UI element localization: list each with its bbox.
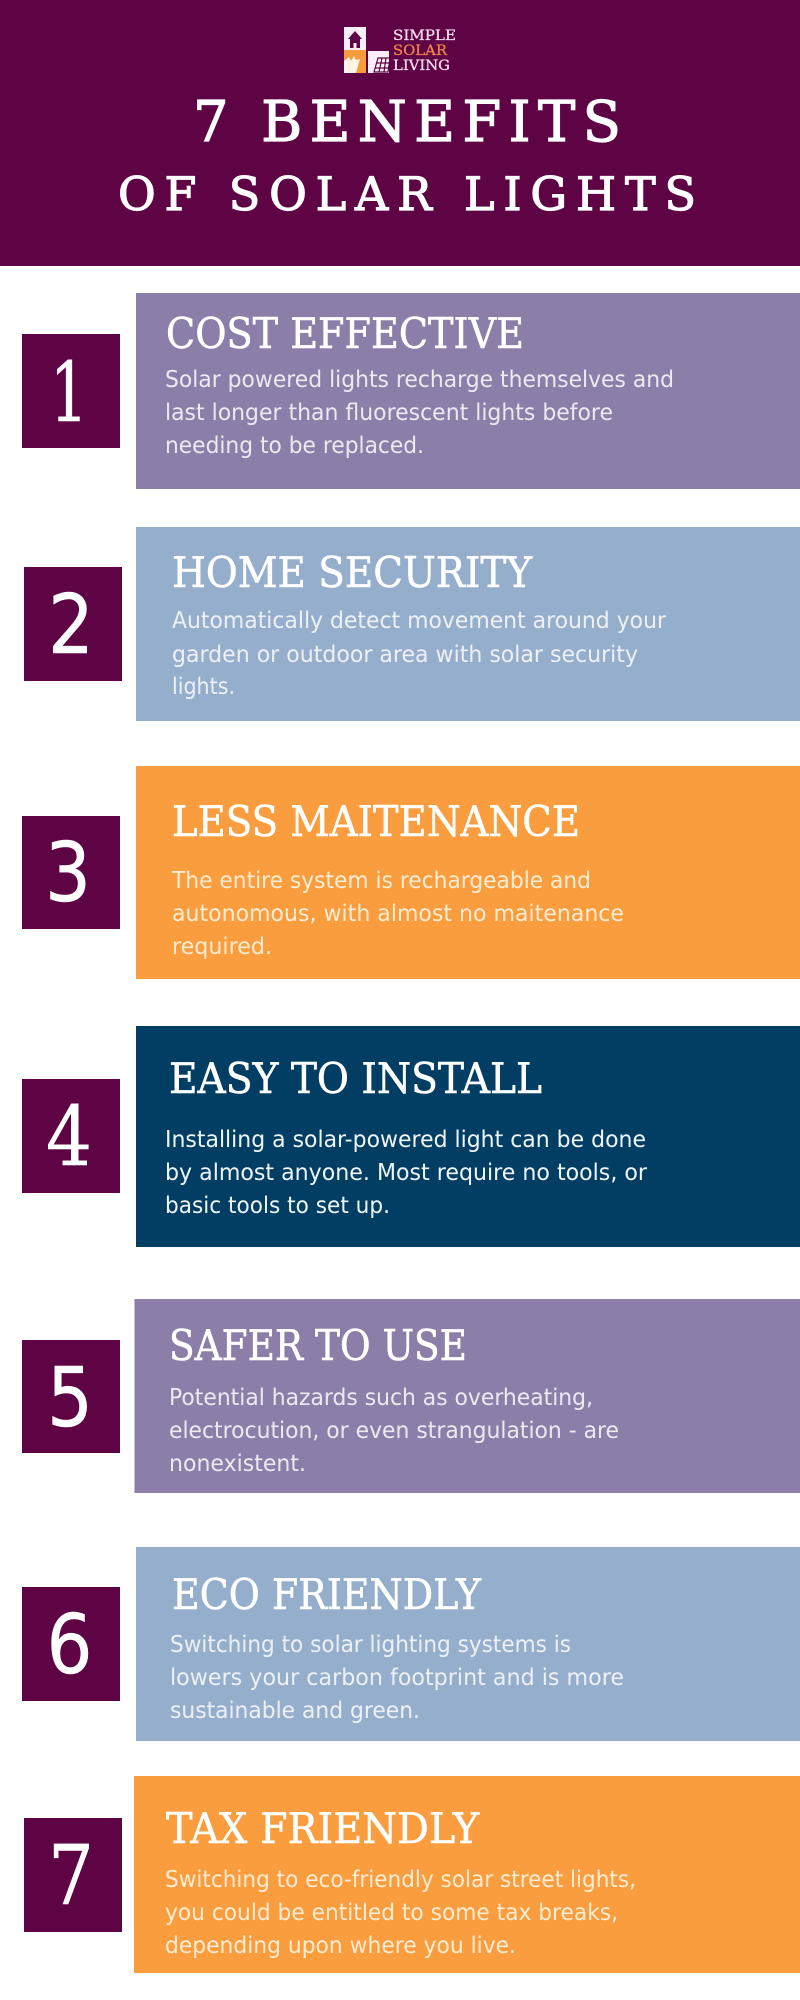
logo wordmark: LIVING [393,58,450,74]
benefit 1: cost effective [22,293,800,489]
number badge 4 [22,1079,120,1193]
text block: lowers your carbon footprint and is more [170,1663,624,1691]
number badge 4: 4 [46,1090,92,1185]
heading: ECO FRIENDLY [172,1570,482,1619]
logo: Simple Solar Living [344,27,456,74]
text block: last longer than fluorescent lights before [165,398,613,426]
benefit 5: safer to use [22,1299,800,1493]
panel: eco friendly [136,1547,800,1741]
panel: header [0,0,800,266]
text block: nonexistent. [169,1449,306,1477]
text block: The entire system is rechargeable and [171,866,591,894]
panel: easy to install [136,1026,800,1247]
number badge 6 [22,1587,120,1701]
number badge 1 [22,334,120,448]
text block [165,365,674,459]
heading: EASY TO INSTALL [169,1054,542,1103]
text block: garden or outdoor area with solar security [172,640,638,668]
title: OF SOLAR LIGHTS [118,167,696,221]
text block [165,1865,636,1959]
number badge 2: 2 [48,578,94,673]
text block [172,606,666,700]
number badge 5: 5 [47,1351,93,1446]
number badge 7 [24,1818,122,1932]
icon: house tile [344,27,366,50]
text block: Automatically detect movement around your [172,606,666,634]
text block: required. [172,932,272,960]
text block: Installing a solar-powered light can be done [165,1125,646,1153]
text block: lights. [172,672,235,700]
number badge 5 [22,1340,120,1453]
text block: Switching to solar lighting systems is [170,1630,571,1658]
text block: by almost anyone. Most require no tools, or [165,1158,647,1186]
text block: needing to be replaced. [165,431,424,459]
benefit 4: easy to install [22,1026,800,1247]
text block: autonomous, with almost no maitenance [172,899,624,927]
text block [170,1630,624,1724]
number badge 3: 3 [45,826,91,921]
logo wordmark: SIMPLE [393,28,456,44]
text block: basic tools to set up. [165,1191,390,1219]
panel: tax friendly [134,1776,800,1973]
logo wordmark: SOLAR [393,43,447,59]
icon: sun tile [344,50,366,73]
heading: COST EFFECTIVE [166,309,524,358]
number badge 3 [22,816,120,929]
heading: LESS MAITENANCE [172,797,580,846]
number badge 1: 1 [50,346,88,441]
heading: SAFER TO USE [169,1321,467,1370]
panel: less maintenance [136,766,800,979]
text block [165,1125,647,1219]
icon: solar panel tile [368,51,390,73]
text block [171,866,624,960]
text block: electrocution, or even strangulation - are [169,1416,619,1444]
benefit 2: home security [24,527,800,721]
text block: depending upon where you live. [165,1931,516,1959]
number badge 2 [24,567,122,681]
panel: safer to use [134,1299,800,1493]
text block: you could be entitled to some tax breaks, [165,1898,618,1926]
number badge 6: 6 [46,1598,92,1693]
benefit 7: tax friendly [24,1776,800,1973]
text block: sustainable and green. [170,1696,420,1724]
number badge 7: 7 [48,1829,94,1924]
panel: home security [136,527,800,721]
text block: Solar powered lights recharge themselves and [165,365,674,393]
title: 7 BENEFITS [193,90,621,155]
benefit 3: less maintenance [22,766,800,979]
text block: Potential hazards such as overheating, [169,1383,593,1411]
logo wordmark [393,28,456,74]
text block [169,1383,619,1477]
heading: TAX FRIENDLY [166,1804,480,1853]
panel: cost effective [136,293,800,489]
text block: Switching to eco-friendly solar street lights, [165,1865,636,1893]
heading: HOME SECURITY [172,548,533,597]
benefit 6: eco friendly [22,1547,800,1741]
title [118,90,696,221]
